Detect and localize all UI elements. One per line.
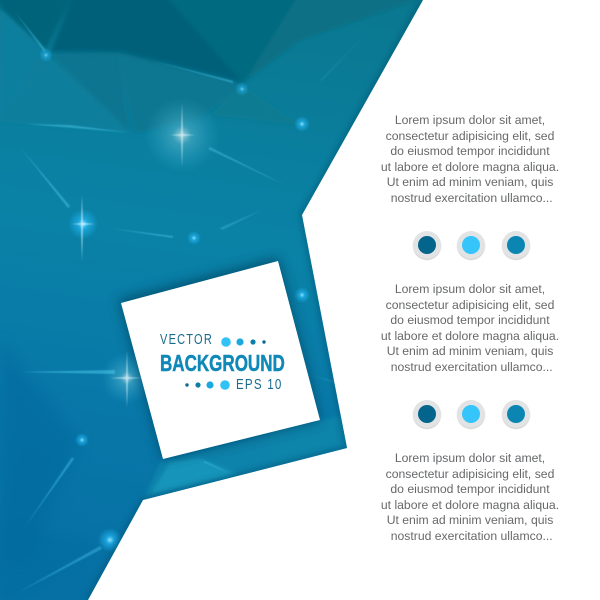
- dots row 1: [412, 231, 530, 260]
- white card: [121, 261, 320, 459]
- polygonal blue background: [0, 0, 423, 600]
- text block 3: nostrud exercitation ullamco...: [391, 529, 553, 543]
- text block 3: Lorem ipsum dolor sit amet,: [395, 451, 545, 465]
- text block 1: Lorem ipsum dolor sit amet,: [395, 113, 545, 127]
- text block 2: [381, 282, 559, 374]
- text block 3: do eiusmod tempor incididunt: [390, 482, 550, 496]
- text block 2: consectetur adipisicing elit, sed: [386, 298, 554, 312]
- text block 3: consectetur adipisicing elit, sed: [386, 467, 554, 481]
- logo: EPS 10: EPS 10: [236, 377, 283, 393]
- text block 1: nostrud exercitation ullamco...: [391, 191, 553, 205]
- text block 1: Ut enim ad minim veniam, quis: [387, 175, 553, 189]
- glows: [152, 104, 211, 164]
- text block 2: do eiusmod tempor incididunt: [390, 313, 550, 327]
- text block 3: Ut enim ad minim veniam, quis: [387, 513, 553, 527]
- facets: [0, 0, 430, 500]
- text block 3: ut labore et dolore magna aliqua.: [381, 498, 559, 512]
- text block 2: Ut enim ad minim veniam, quis: [387, 344, 553, 358]
- text block 1: [381, 113, 559, 205]
- text block 1: do eiusmod tempor incididunt: [390, 144, 550, 158]
- logo: VECTOR: VECTOR: [160, 332, 213, 348]
- text block 2: Lorem ipsum dolor sit amet,: [395, 282, 545, 296]
- logo: BACKGROUND: BACKGROUND: [160, 350, 285, 376]
- text block 1: ut labore et dolore magna aliqua.: [381, 160, 559, 174]
- edge shadow: [88, 0, 423, 600]
- rays of light: [18, 16, 334, 588]
- dots row 2: [412, 400, 530, 430]
- text block 3: [381, 451, 559, 543]
- card shadow: [119, 258, 320, 459]
- text block 2: nostrud exercitation ullamco...: [391, 360, 553, 374]
- soft lower-left facets: [6, 366, 64, 454]
- text block 2: ut labore et dolore magna aliqua.: [381, 329, 559, 343]
- text block 1: consectetur adipisicing elit, sed: [386, 129, 554, 143]
- sparkles: [72, 103, 195, 408]
